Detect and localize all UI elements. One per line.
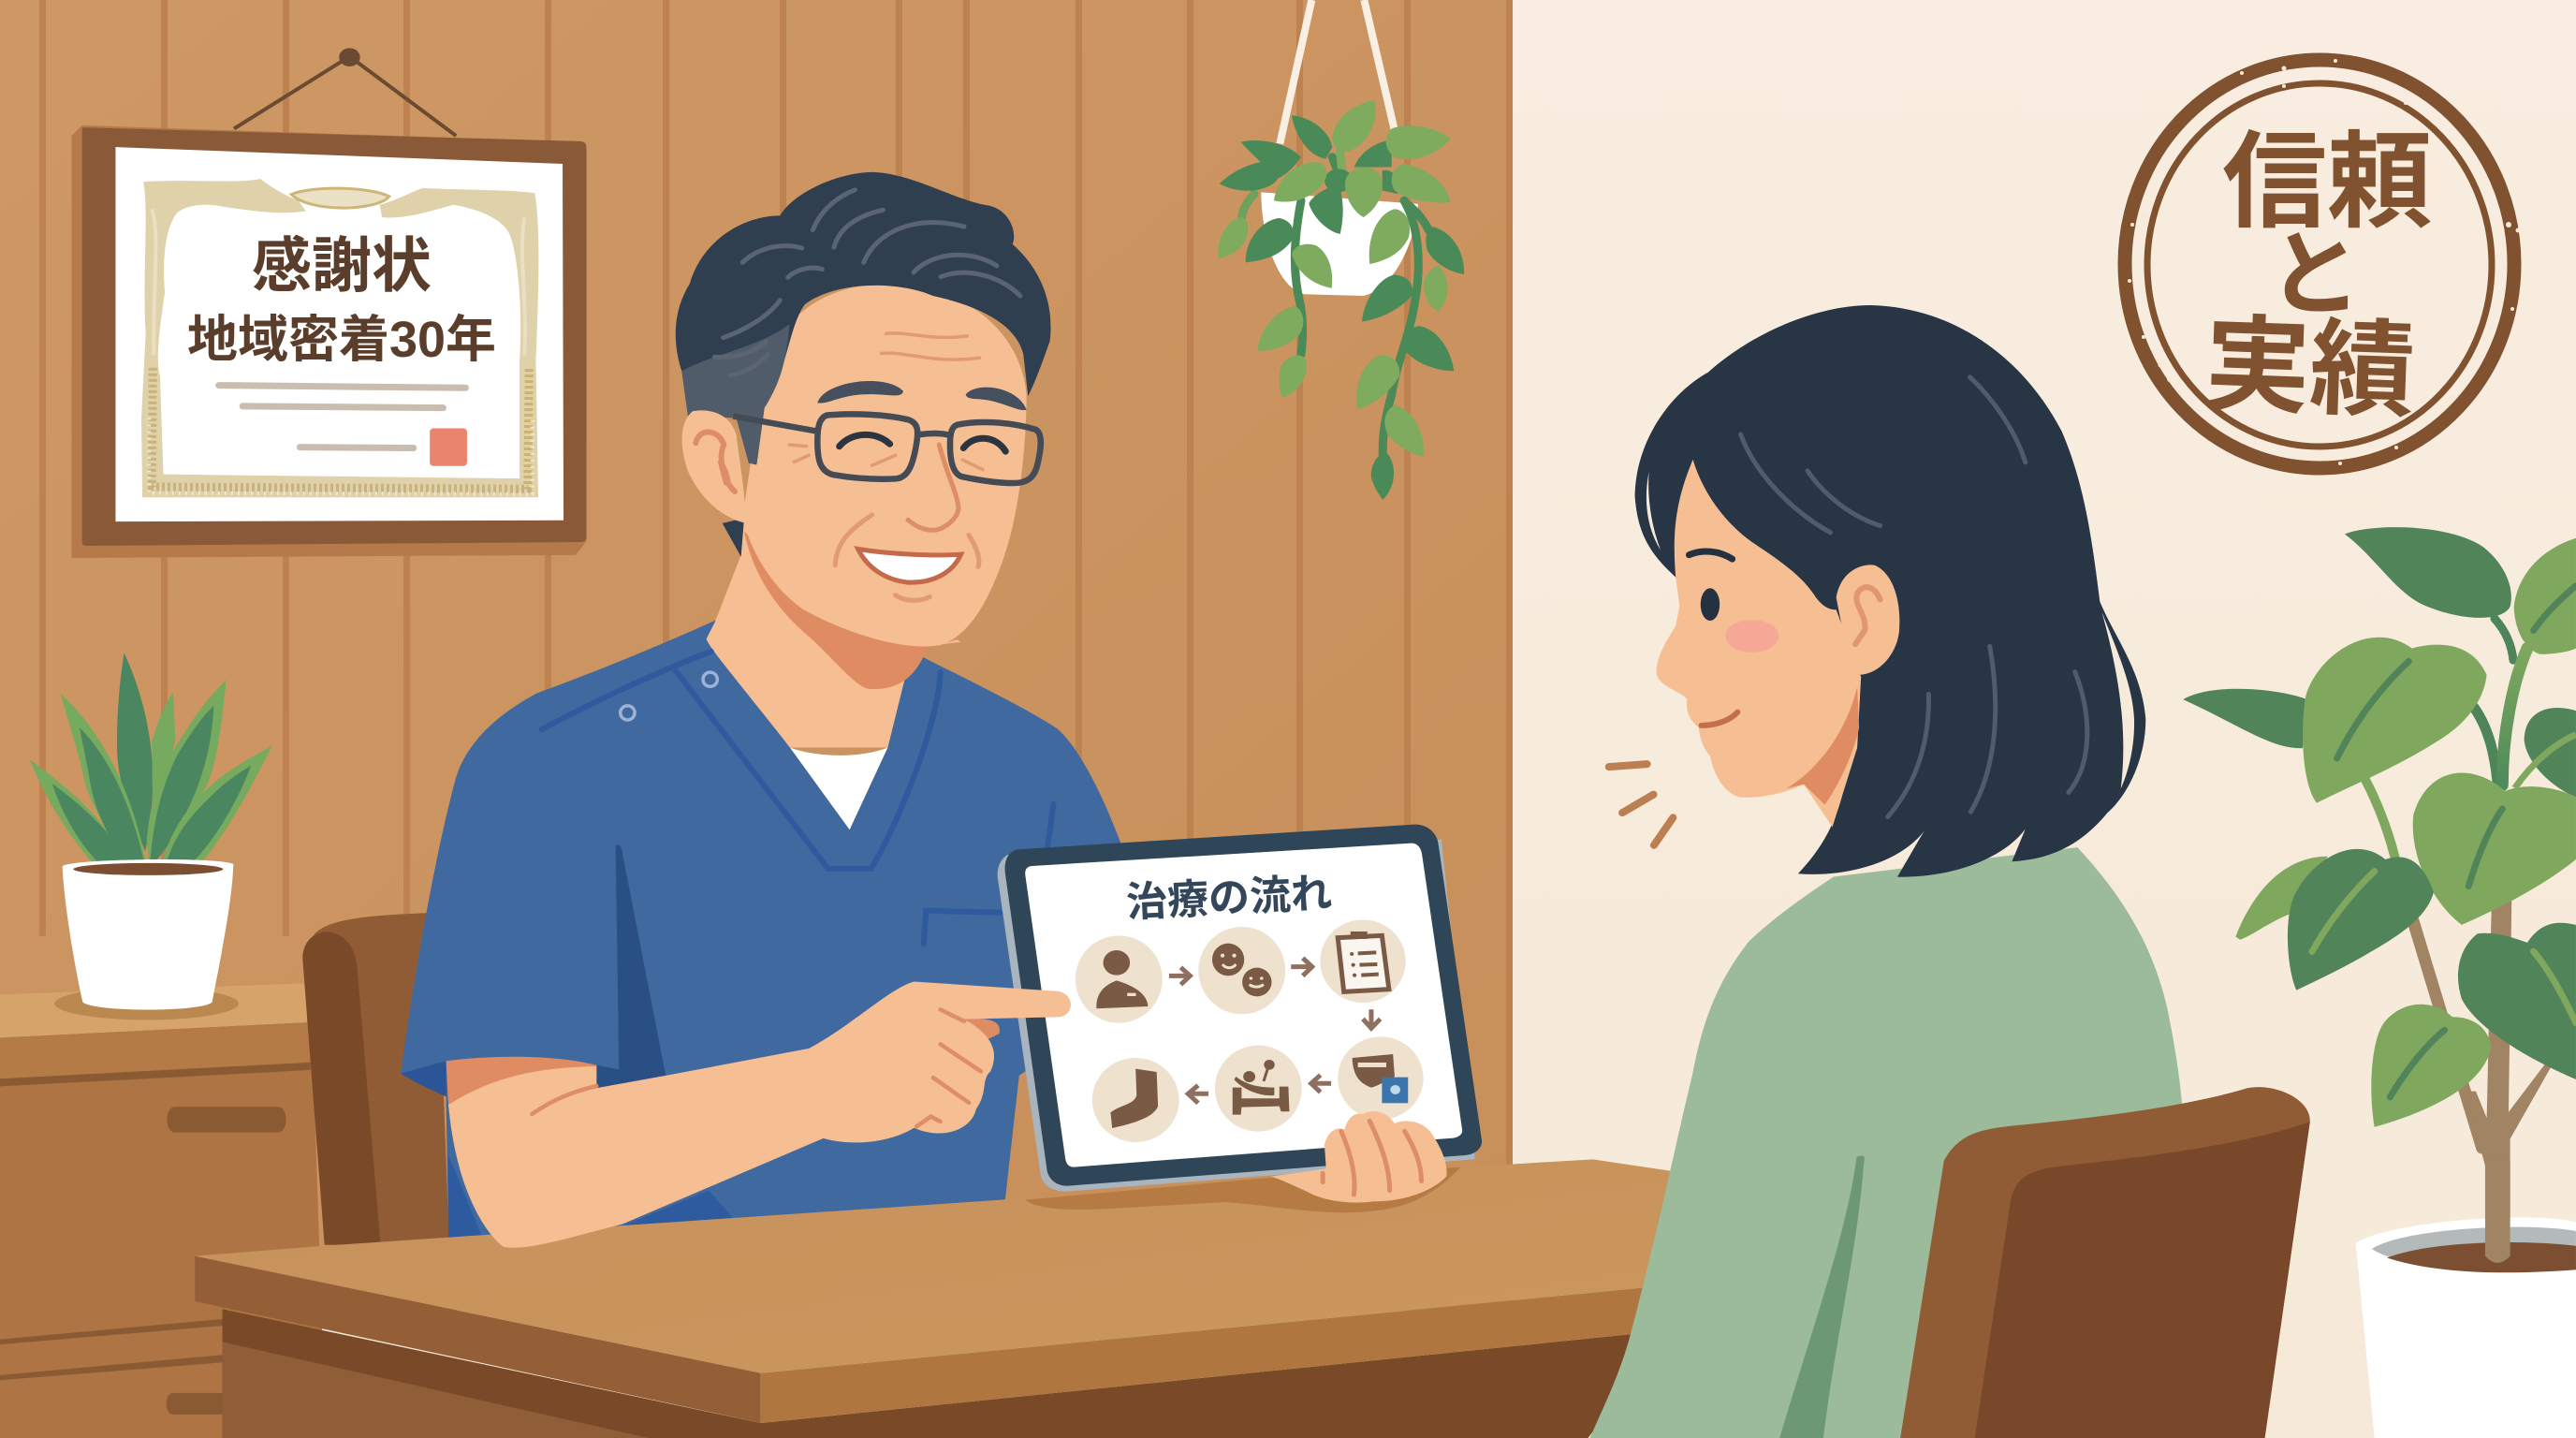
grey temple hair (681, 324, 789, 464)
gold ornamental border (141, 179, 538, 497)
neck (707, 599, 947, 747)
smile (858, 549, 961, 582)
leaves (1220, 115, 1464, 500)
leaves (2183, 527, 2576, 1127)
doctor torso (401, 599, 1123, 1239)
hair gaps (1647, 472, 1661, 550)
plant stems (2365, 619, 2527, 1148)
tablet title text: 治療の流れ (1125, 871, 1333, 926)
drawer handle (167, 1107, 286, 1133)
stamp outer ring (2125, 60, 2514, 468)
icon: smiling faces (1212, 944, 1272, 996)
stamp text line 2: と (2268, 223, 2362, 328)
undershirt (790, 747, 887, 829)
upper neck (711, 519, 961, 665)
certificate paper (115, 147, 564, 521)
step circles (1076, 919, 1424, 1142)
icon: clipboard (1338, 932, 1389, 991)
doctor's chair (302, 913, 449, 1245)
leaf ribs (2312, 586, 2576, 1097)
shirt folds (401, 1061, 446, 1096)
tablet silver edge (998, 840, 1475, 1192)
large potted plant (2183, 527, 2576, 1438)
woman's chair (1900, 1087, 2310, 1438)
wrinkles and nose (789, 333, 983, 600)
aloe leaves (30, 653, 272, 867)
eyebrows (817, 381, 903, 404)
neck shadow (1787, 687, 1859, 804)
flow arrows (1169, 958, 1381, 1103)
planter bowl (1261, 192, 1418, 296)
hanging plant (1218, 0, 1464, 500)
icon: boot (1110, 1069, 1158, 1128)
ear (1837, 565, 1899, 675)
hair (676, 172, 1051, 464)
cheek blush (1725, 620, 1778, 653)
hair strands (1741, 377, 2087, 816)
ear (682, 410, 746, 523)
hanging cord (234, 48, 456, 136)
desk (195, 1159, 1676, 1438)
back hair (1635, 305, 2145, 877)
icon: reception person (1096, 950, 1148, 1008)
trunk (2465, 898, 2551, 1261)
wooden frame (82, 127, 587, 546)
brown stamp: 信頼と実績 (2125, 59, 2520, 468)
lower drawer handle (167, 1393, 228, 1415)
glasses (733, 414, 1041, 483)
hair below ear (723, 519, 744, 557)
stamp text line 1: 信頼 (2222, 124, 2432, 241)
signature lines (219, 386, 465, 448)
aloe plant in white pot (30, 653, 272, 1020)
tablet showing treatment flow (998, 825, 1482, 1192)
white pot (63, 859, 233, 1010)
frame shadow (72, 125, 587, 558)
collar seams and pocket (542, 652, 1054, 944)
shoulder buttons (621, 672, 717, 720)
cabinet with drawers (0, 983, 325, 1438)
icon: treatment bed (1233, 1060, 1289, 1115)
closed smiling eyes (840, 434, 1005, 451)
tablet shadow on desk (1025, 1167, 1461, 1212)
tablet body (1005, 825, 1482, 1186)
green sweater (1589, 847, 2183, 1438)
eye and brow (1701, 588, 1720, 621)
blue scrub shirt (401, 620, 1123, 1239)
certificate subtitle text: 地域密着30年 (187, 312, 496, 368)
certificate title text: 感謝状 (252, 232, 432, 300)
stamp wear specks (2128, 59, 2520, 465)
white plant pot (2356, 1160, 2576, 1438)
speech marks (1609, 764, 1673, 845)
icon: insurance card (1353, 1054, 1408, 1103)
vines (1242, 151, 1429, 455)
face and neck (1657, 460, 1861, 827)
hanging cords (1280, 0, 1396, 144)
stamp inner ring (2147, 83, 2492, 447)
stamp text line 3: 実績 (2203, 306, 2417, 431)
certificate on wall (72, 48, 587, 558)
tablet screen (1025, 844, 1462, 1167)
inner sleeve shade (446, 1057, 596, 1107)
doctor's arm and pointing hand (448, 981, 1071, 1248)
background: wood panel wall (0, 0, 1513, 1311)
doctor's hand holding tablet (1271, 1111, 1447, 1203)
neck shadow under jaw (744, 532, 961, 689)
face (742, 284, 1027, 646)
red seal (430, 429, 467, 466)
smile (1702, 712, 1737, 726)
woman patient (1589, 305, 2183, 1438)
head and hair (1609, 305, 2145, 877)
doctor head (676, 172, 1051, 689)
hair highlights (714, 190, 1020, 375)
